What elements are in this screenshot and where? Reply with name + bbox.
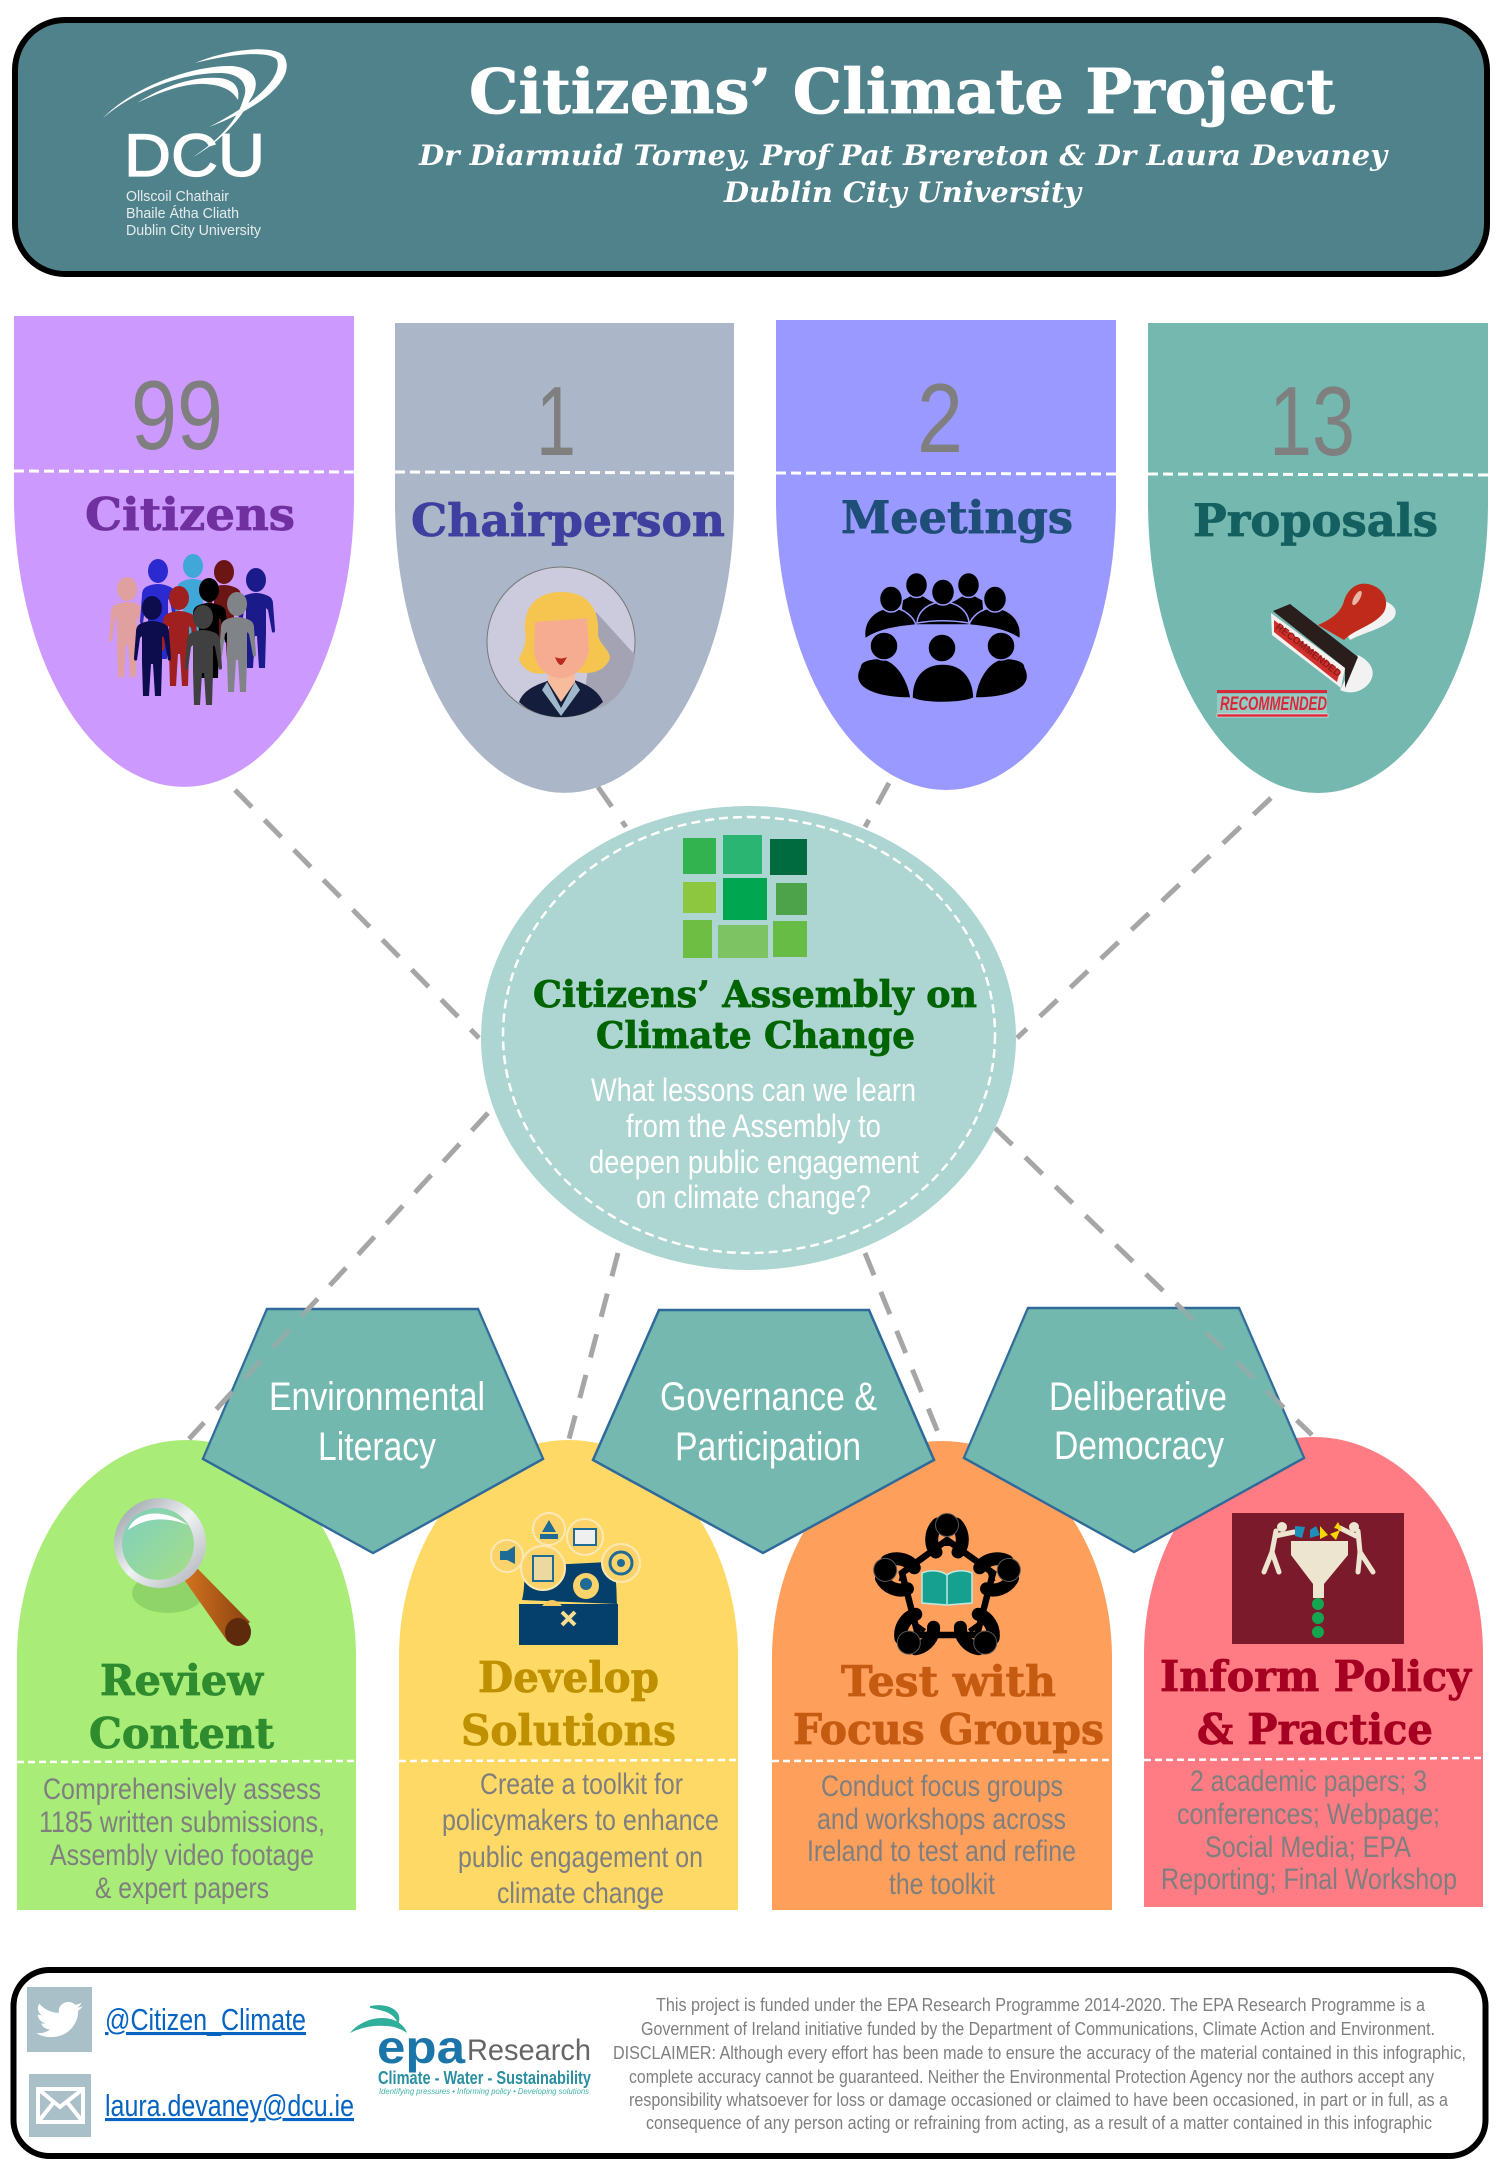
panel: bottom arch develop solutions bbox=[399, 1440, 738, 1910]
heading: meetings: Meetings bbox=[841, 491, 1073, 544]
heading: review content bbox=[89, 1656, 275, 1758]
pentagon: governance and participation bbox=[593, 1310, 934, 1553]
EPA research logo: Climate - Water - Sustainability bbox=[378, 2067, 592, 2088]
text: inform policy and practice bbox=[1161, 1765, 1457, 1896]
research question: deepen public engagement bbox=[589, 1144, 919, 1180]
heading: assembly name: Climate Change bbox=[596, 1015, 915, 1057]
label: environmental literacy: Literacy bbox=[318, 1425, 436, 1469]
university: Dublin City University bbox=[723, 176, 1083, 209]
dashed connectors: bottom bbox=[189, 1113, 1312, 1552]
heading: assembly name bbox=[533, 974, 977, 1057]
label: governance and participation: Governance & bbox=[660, 1375, 877, 1419]
heading: test with focus groups bbox=[793, 1657, 1104, 1754]
icon: email bbox=[29, 2074, 91, 2137]
label: deliberative democracy bbox=[1049, 1375, 1227, 1468]
twitter handle: @Citizen_Climate bbox=[105, 2002, 306, 2037]
text: test with focus groups bbox=[807, 1770, 1076, 1901]
funding and disclaimer text bbox=[613, 1995, 1466, 2133]
icon: open book bbox=[922, 1571, 972, 1605]
header panel bbox=[15, 20, 1487, 274]
pentagon: environmental literacy bbox=[203, 1309, 543, 1553]
panel: meetings bbox=[776, 320, 1116, 790]
icon: funnel with figures bbox=[1232, 1513, 1404, 1644]
heading: proposals: Proposals bbox=[1193, 494, 1438, 547]
icon: twitter bbox=[27, 1987, 92, 2052]
stamped label: RECOMMENDED bbox=[1220, 694, 1327, 715]
label: governance and participation: Participation bbox=[675, 1425, 861, 1469]
text: inform policy and practice: Social Media; EPA bbox=[1205, 1831, 1411, 1864]
heading: citizens: Citizens bbox=[85, 488, 295, 541]
icon: focus group circle bbox=[870, 1514, 1024, 1661]
icon: toolkit box bbox=[491, 1513, 640, 1645]
heading: test with focus groups: Focus Groups bbox=[793, 1705, 1104, 1754]
icon: magnifying glass bbox=[114, 1498, 251, 1646]
label: governance and participation bbox=[660, 1375, 877, 1469]
DCU logo bbox=[103, 49, 287, 239]
text: review content: Assembly video footage bbox=[50, 1839, 314, 1872]
heading: inform policy and practice: Inform Policy bbox=[1160, 1652, 1473, 1701]
icon: rubber stamp: RECOMMENDED bbox=[1273, 622, 1343, 680]
DCU logo: Ollscoil Chathair bbox=[126, 188, 229, 205]
number: 1: 1 bbox=[536, 366, 576, 476]
text: develop solutions: policymakers to enhance bbox=[442, 1804, 719, 1837]
EPA research logo bbox=[350, 2006, 592, 2096]
number: 2: 2 bbox=[917, 363, 963, 473]
text: test with focus groups: the toolkit bbox=[889, 1868, 996, 1901]
dashed connectors: top bbox=[235, 783, 1271, 1038]
icon: assembly logo squares bbox=[683, 835, 807, 958]
icon: chairperson portrait bbox=[487, 567, 635, 717]
heading: develop solutions: Solutions bbox=[461, 1706, 676, 1755]
text: inform policy and practice: 2 academic papers; 3 bbox=[1190, 1765, 1427, 1798]
text: test with focus groups: and workshops across bbox=[817, 1803, 1066, 1836]
number: 99: 99 bbox=[131, 360, 223, 470]
heading: review content: Review bbox=[100, 1656, 264, 1705]
icon: group around table bbox=[857, 572, 1028, 702]
EPA research logo: epa bbox=[377, 2021, 465, 2073]
heading: test with focus groups: Test with bbox=[841, 1657, 1056, 1706]
panel: chairperson bbox=[395, 323, 734, 793]
stamped label bbox=[1217, 690, 1328, 717]
heading: review content: Content bbox=[89, 1709, 275, 1758]
panel: proposals bbox=[1148, 323, 1488, 793]
icon: crowd of people bbox=[109, 554, 275, 705]
research question: on climate change? bbox=[636, 1179, 871, 1215]
heading: assembly name: Citizens’ Assembly on bbox=[533, 974, 977, 1016]
text: review content: & expert papers bbox=[95, 1872, 269, 1905]
research question bbox=[589, 1072, 919, 1215]
text: develop solutions: climate change bbox=[497, 1877, 664, 1910]
label: environmental literacy: Environmental bbox=[269, 1375, 485, 1419]
panel: bottom arch inform policy and practice bbox=[1144, 1437, 1483, 1907]
text: review content bbox=[39, 1773, 325, 1905]
heading: inform policy and practice bbox=[1160, 1652, 1473, 1754]
DCU logo: Bhaile Átha Cliath bbox=[126, 205, 239, 222]
heading: develop solutions bbox=[461, 1653, 676, 1755]
heading: chairperson: Chairperson bbox=[411, 494, 725, 547]
authors: Dr Diarmuid Torney, Prof Pat Brereton & Dr Laura Devaney bbox=[418, 139, 1389, 172]
number: 13: 13 bbox=[1269, 366, 1355, 476]
text: develop solutions: public engagement on bbox=[458, 1841, 703, 1874]
research question: What lessons can we learn bbox=[591, 1072, 916, 1108]
text: develop solutions: Create a toolkit for bbox=[480, 1768, 683, 1801]
heading: inform policy and practice: & Practice bbox=[1197, 1705, 1433, 1754]
heading: develop solutions: Develop bbox=[478, 1653, 659, 1702]
DCU logo: DCU bbox=[124, 122, 265, 189]
pentagon: deliberative democracy bbox=[964, 1308, 1304, 1552]
panel: citizens bbox=[14, 316, 354, 787]
text: test with focus groups: Ireland to test and refine bbox=[807, 1835, 1076, 1868]
EPA research logo: Research bbox=[467, 2034, 591, 2067]
panel: bottom arch test with focus groups bbox=[772, 1441, 1112, 1910]
funding and disclaimer text: This project is funded under the EPA Research Programme 2014-2020. The EPA Research Programme is a bbox=[656, 1995, 1426, 2015]
DCU logo: Dublin City University bbox=[126, 222, 261, 239]
text: develop solutions bbox=[442, 1768, 719, 1910]
title: Citizens’ Climate Project bbox=[469, 55, 1335, 128]
text: review content: Comprehensively assess bbox=[43, 1773, 321, 1806]
research question: from the Assembly to bbox=[626, 1108, 881, 1144]
label: deliberative democracy: Democracy bbox=[1054, 1424, 1224, 1468]
central circle: citizens' assembly bbox=[481, 806, 1016, 1270]
text: review content: 1185 written submissions, bbox=[39, 1806, 325, 1839]
label: deliberative democracy: Deliberative bbox=[1049, 1375, 1227, 1419]
email address: laura.devaney@dcu.ie bbox=[105, 2088, 354, 2123]
footer panel bbox=[14, 1970, 1486, 2156]
EPA research logo: Identifying pressures • Informing policy • Developing solutions bbox=[379, 2087, 589, 2096]
text: inform policy and practice: conferences; Webpage; bbox=[1177, 1798, 1440, 1831]
label: environmental literacy bbox=[269, 1375, 485, 1469]
panel: bottom arch review content bbox=[17, 1440, 356, 1910]
text: test with focus groups: Conduct focus groups bbox=[821, 1770, 1063, 1803]
icon: rubber stamp bbox=[1217, 584, 1396, 717]
